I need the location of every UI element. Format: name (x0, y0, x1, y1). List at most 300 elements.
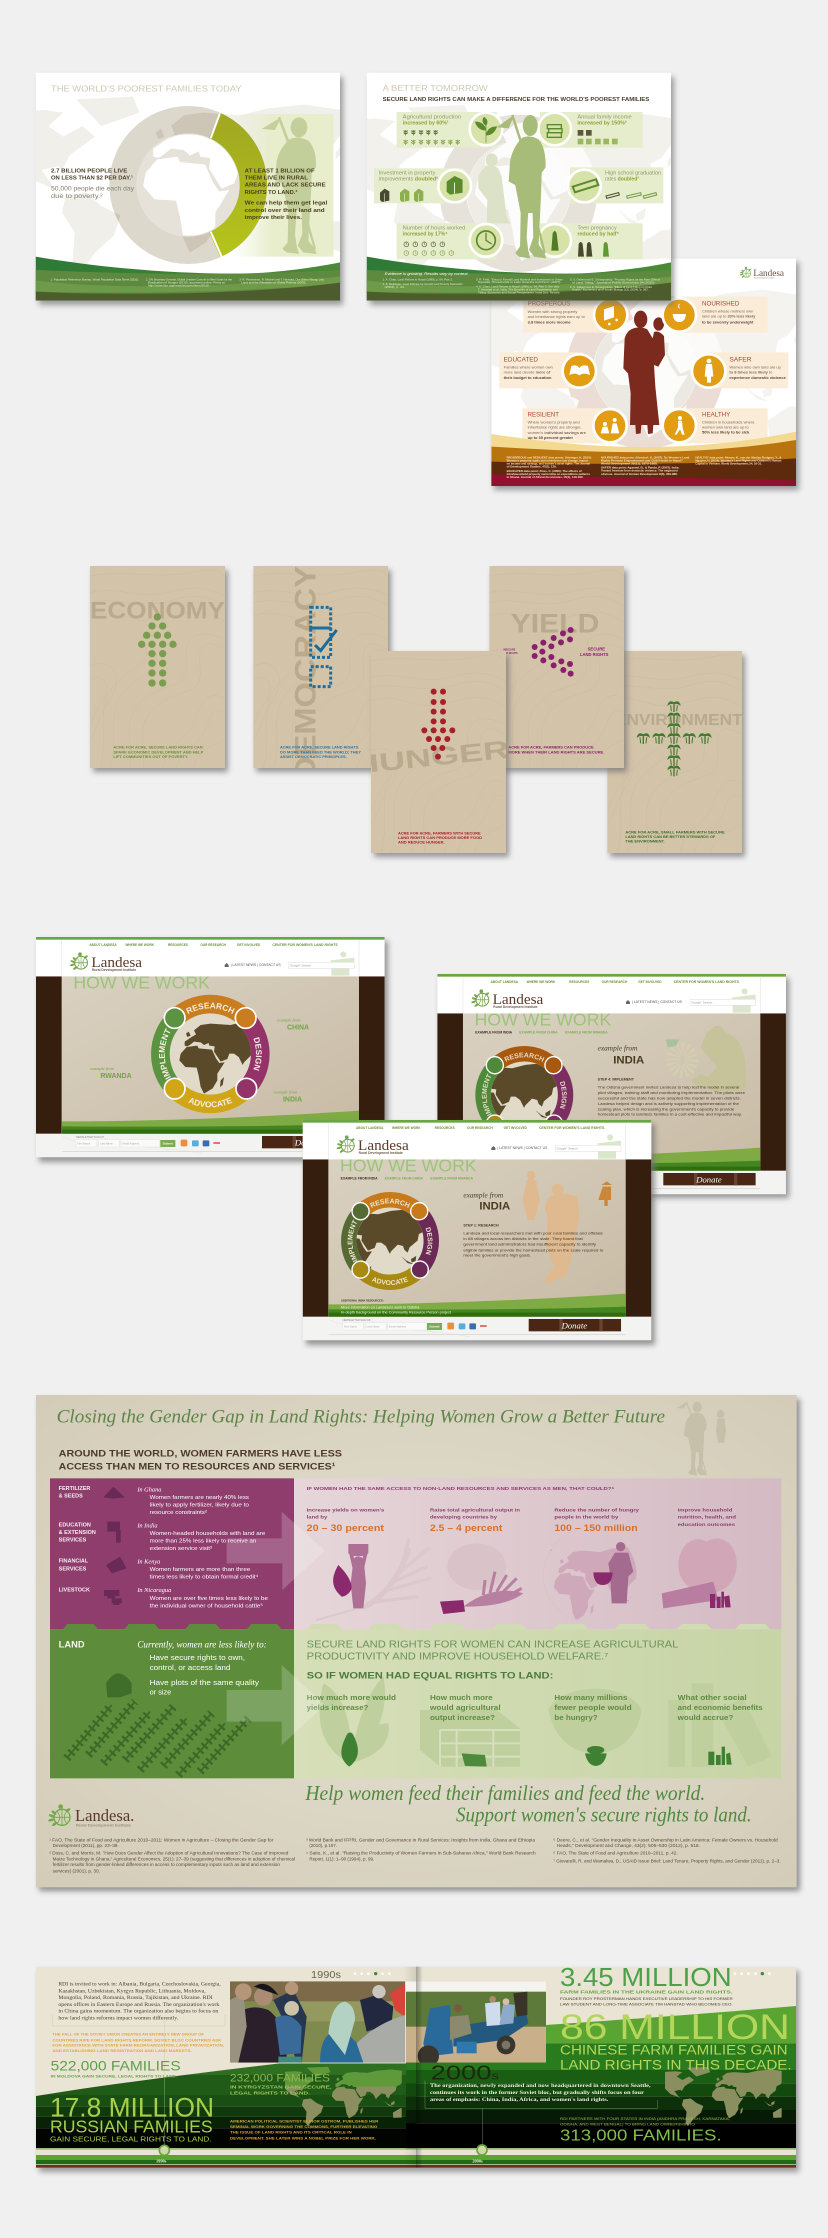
footer: newsletter and donate (329, 1319, 626, 1337)
footer waves with sources: (2003), p. 44. (385, 287, 405, 289)
timeline band: 2000s (472, 2159, 483, 2164)
text block: rdi invited: RDI is invited to work in: Albania, Bulgaria, Czechoslovakia, Georgia, (58, 1981, 221, 1987)
panel: land (green): or size (150, 1688, 171, 1697)
navigation: GET INVOLVED (504, 1126, 528, 1130)
stat: 3.45 million: LAW STUDENT AND LONG-TIME ASSOCIATE TIM HANSTAD WHO BECOMES CEO. (560, 2002, 733, 2006)
chart: how we work wheel: ADVOCATE (188, 1097, 232, 1108)
logo: Landesa: Landesa (91, 955, 143, 971)
footer waves with sources: http://www.fao.org/news/story/en/item/2010. (148, 284, 210, 287)
navigation: ABOUT LANDESA (89, 943, 117, 947)
navigation: CENTER FOR WOMEN'S LAND RIGHTS (674, 980, 739, 984)
panel: resource gaps (purple): LIVESTOCK (59, 1587, 90, 1593)
panel: democracy poster card (253, 566, 391, 780)
chart: donut of poverty share (109, 106, 334, 264)
panel: what could happen (pink): Increase yields on women's (307, 1507, 385, 1512)
callout: investment in property (374, 168, 471, 203)
footer: newsletter and donate (463, 1173, 760, 1191)
heading: ENVIRONMENT (615, 712, 743, 729)
stat: 313,000 families: ODISHA, AND WEST BENGAL) TO BRING LAND OWNERSHIP TO (560, 2123, 695, 2127)
heading: resources gap (59, 1449, 342, 1471)
timeline band: 1990s (156, 2159, 167, 2164)
footer waves with sources: Titling: Economic and Social Perspectives. India Dev. Review (478, 291, 560, 294)
icon: purple beet rows (532, 627, 574, 677)
panel: land (green): Have secure rights to own, (150, 1653, 245, 1662)
stat: 522,000 families (51, 2058, 181, 2078)
caption: LIFT COMMUNITIES OUT OF POVERTY. (113, 755, 189, 759)
footer waves with sources: obvious. Journal of Human Development 8(3), 359-388. (601, 472, 678, 476)
text block: 2.7 billion: 50,000 people die each day (51, 187, 134, 193)
caption: ACRE FOR ACRE, SECURE LAND RIGHTS CAN (113, 746, 204, 750)
illustration: farmer bending with plants (665, 1026, 746, 1091)
callout: healthy: 50% less likely to be sick (702, 429, 750, 434)
text block: 1 billion rural: improve their lives. (245, 215, 302, 221)
label: insecure land rights: INSECURE (503, 649, 516, 651)
navigation: RESOURCES (168, 943, 188, 947)
text block: additional resources (341, 1299, 451, 1314)
callout: nourished: NOURISHED (702, 301, 739, 308)
callout: educated: more land devote more of (504, 370, 551, 375)
footer waves with sources: 2. K. Deininger, Land Policies for Growth and Poverty Reduction (383, 283, 464, 286)
footnotes: (2010), p.107. (309, 1843, 337, 1848)
text block: india step 4: homestead plots to landless families in a cost-effective and impactful way. (598, 1113, 742, 1117)
stat: 3.45 million: 3.45 MILLION (560, 1962, 732, 1992)
text block: india step 1: example from (463, 1190, 503, 1199)
panel: what could happen (pink) (294, 1478, 781, 1633)
heading: HUNGER (352, 736, 510, 780)
panel: resource gaps (purple) (50, 1478, 294, 1629)
text block: soviet union (52, 2031, 224, 2053)
footer waves with sources: 4. K. Chan, Land Reform in Nepal (1999), p. 64, Part 3; See also (476, 286, 560, 289)
panel: what could happen (pink): Reduce the number of hungry (554, 1507, 640, 1512)
stat: 17.8 million: 17.8 MILLION (50, 2093, 214, 2123)
caption: LAND RIGHTS CAN BE BETTER STEWARDS OF (625, 835, 715, 839)
panel: website screen how we work overview (35, 937, 392, 1166)
label: rwanda example (90, 1066, 132, 1080)
logo: Landesa (336, 1135, 409, 1155)
text block: india step 4: STEP 4: IMPLEMENT (598, 1077, 635, 1081)
callout: educated: their budget to education (504, 375, 552, 380)
panel: 1990s page (36, 1967, 424, 2168)
label: insecure land rights (503, 649, 518, 655)
text block: india step 4: INDIA (613, 1054, 644, 1066)
navigation (89, 943, 338, 947)
callout: healthy: women own land are up to (702, 424, 750, 429)
text block: 1 billion rural: control over their land and (245, 208, 325, 214)
panel: resource gaps (purple): In Kenya (136, 1558, 160, 1565)
footer waves with sources: PROSPEROUS and RESILIENT data points: Deininger, K. (2010). (507, 455, 592, 459)
panel: equal rights to land (light green): yields increase? (307, 1703, 369, 1712)
panel: website screen india implement step: Google" Search (691, 1001, 713, 1005)
callout: high school graduation (568, 167, 663, 203)
panel: what could happen (pink): Improve household (678, 1507, 733, 1512)
navigation: OUR RESEARCH (602, 980, 628, 984)
heading: HOW WE WORK (340, 1156, 477, 1176)
text block: organization: areas of emphasis: China, India, Africa, and women's land rights. (430, 2098, 609, 2103)
panel: resource gaps (purple): more than 25% less likely to receive an (150, 1539, 256, 1545)
panel: equal rights to land (light green): How much more would (307, 1693, 396, 1702)
panel: 2000s page (406, 1962, 804, 2168)
navigation (491, 980, 739, 984)
stat: 86 million: 86 MILLION (560, 2008, 790, 2047)
footer waves with sources: 1. A. Chan, Land Reform in Nepal (1999), p. 64, Part 3. (383, 279, 453, 282)
panel: what could happen (pink): developing countries by (430, 1515, 498, 1520)
world map (643, 2067, 804, 2126)
panel: a better tomorrow for women (maroon slide) (490, 258, 802, 494)
footer waves with sources (491, 432, 796, 486)
panel: what could happen (pink): land by (307, 1515, 328, 1520)
photo: truck with passengers (406, 1981, 546, 2067)
text block: india step 4: pilot villages, training staff and monitoring implementation. The pilots were (598, 1091, 745, 1095)
footer: newsletter and social: Donate (294, 1137, 321, 1147)
text block: rdi invited: Mongolia, Poland, Romania, Russia, Tajikistan, and Ukraine. RDI (58, 1995, 213, 2001)
text block: soviet union: FOR ASSISTANCE WITH STATE FARM REORGANIZATION, LAND PRIVATIZATION, (52, 2043, 224, 2048)
text block: rdi invited: Kazakhstan, Uzbekistan, Kyrgyz Republic, Lithuania, Moldova, (58, 1988, 206, 1994)
panel: land (green) (50, 1624, 294, 1778)
navigation: CENTER FOR WOMEN'S LAND RIGHTS (272, 943, 338, 947)
footer: newsletter and social: Submit (163, 1142, 173, 1146)
panel: website screen india research step: Google" Search (557, 1147, 578, 1151)
panel: equal rights to land (light green): How much more (430, 1693, 493, 1702)
panel: what could happen (pink): Raise total agricultural output in (430, 1507, 520, 1512)
stat: 86 million (560, 2008, 792, 2072)
illustration: grain and carrots (440, 1543, 523, 1614)
callout: educated: Families where women own (504, 364, 553, 369)
text block: india step 1: meet the government's high goals. (463, 1254, 531, 1258)
panel: equal rights to land (light green): How many millions (554, 1693, 627, 1702)
panel: what could happen (pink): education outcomes (678, 1522, 736, 1527)
callout: agricultural production: Agricultural production (403, 114, 461, 120)
timeline band (36, 2015, 416, 2168)
label: secure land rights (580, 647, 609, 657)
label: india example (274, 1090, 302, 1104)
callout: safer: Women who own land are up (729, 364, 782, 369)
callout: agricultural production: increased by 60%¹ (403, 121, 449, 127)
callout: resilient: women's individual savings are (528, 430, 587, 435)
text block: rdi invited: how land rights reforms impact women differently. (58, 2015, 178, 2022)
footer waves with sources: Capital in Vietnam. World Development, 54, 18-31. (695, 462, 762, 466)
chart: how we work wheel, research step: DESIGN (426, 1227, 432, 1255)
stat: 17.8 million: GAIN SECURE, LEGAL RIGHTS TO LAND. (50, 2134, 212, 2143)
panel: equal rights to land (light green): What other social (678, 1693, 747, 1702)
tabs: example countries (475, 1031, 608, 1035)
text block: india step 4: example from (598, 1044, 637, 1053)
callout: nourished: Children whose mothers own (702, 308, 753, 313)
logo: Landesa: Rural Development Institute (359, 1151, 403, 1155)
footer waves with sources: 3. R. Field, "Entry to Formal Land Markets and Investment in Urban (476, 278, 564, 281)
stat: 3.45 million: FARM FAMILIES IN THE UKRAINE GAIN LAND RIGHTS. (560, 1990, 733, 1995)
footer: newsletter and donate: First Name (344, 1325, 358, 1329)
footer waves with sources (36, 257, 340, 301)
callout: safer: SAFER (729, 357, 752, 364)
footnotes: fertilizer results from gender-linked differences in access to complementary inputs such as land and extension (53, 1862, 281, 1867)
text block: india step 1: government land administrators had insufficient capacity to identify (463, 1243, 596, 1247)
footer waves with sources: of Development Studies, 47(5), 120. (507, 465, 557, 469)
footer: newsletter and donate: NEWSLETTER SIGN UP (343, 1319, 371, 1322)
heading: resources gap: AROUND THE WORLD, WOMEN FARMERS HAVE LESS (59, 1449, 342, 1459)
navigation: OUR RESEARCH (467, 1126, 493, 1130)
panel: land (green): Have plots of the same quality (150, 1678, 259, 1687)
panel: what could happen (pink): 2.5 – 4 percent (430, 1523, 502, 1533)
illustration: apple, diploma and books (662, 1538, 737, 1608)
text block: rdi invited: in China gains momentum. The organization also begins to focus on (58, 2008, 219, 2015)
callout: annual family income: Annual family income (577, 114, 632, 120)
callout: nourished: to be severely underweight (702, 319, 754, 324)
footnotes: ⁴ Saito, K., et al. "Raising the Productivity of Women Farmers in Sub-Saharan Africa," World Bank Research (306, 1851, 536, 1856)
callout: high school graduation: rates doubled³ (605, 177, 639, 183)
footer waves with sources: HEALTHY data point: Menon, N., van der Meulen Rodgers, Y., & (695, 455, 781, 459)
icon: dotted ballot boxes with check (311, 607, 337, 687)
caption: THE ENVIRONMENT. (625, 840, 665, 844)
text block: 2.7 billion: due to poverty.² (51, 194, 103, 200)
footer waves with sources: 5. S. Galiani and E. Schargrodsky, "Property Rights for the Poor: Effects (570, 279, 661, 282)
chart: how we work wheel: DESIGN (254, 1037, 262, 1071)
text block: 1 billion rural: We can help them get legal (245, 201, 328, 207)
panel: website screen india implement step (436, 974, 793, 1202)
icon: faded farmer and woman silhouettes (677, 1402, 726, 1475)
chart: how we work wheel, implement step: RESEARCH (504, 1052, 544, 1062)
panel: hunger poster card (352, 651, 510, 857)
panel: a better tomorrow slide (366, 73, 678, 309)
navigation: RESOURCES (569, 980, 589, 984)
footer: newsletter and donate: Last Name (367, 1325, 380, 1329)
logo: Landesa: Landesa. (75, 1806, 134, 1825)
text block: organization: continues its work in the former Soviet bloc, but gradually shifts focus on four (430, 2091, 645, 2096)
heading: ECONOMY (90, 597, 225, 624)
panel: what could happen (pink): 100 – 150 million (554, 1523, 638, 1533)
navigation dots (354, 1972, 391, 1975)
panel: resource gaps (purple): SERVICES (59, 1538, 87, 1544)
footnotes (49, 1837, 781, 1874)
logo: Landesa: Landesa (358, 1138, 409, 1154)
panel: what could happen (pink): people in the world by (554, 1515, 619, 1520)
tabs: example countries: EXAMPLE FROM CHINA (519, 1031, 558, 1035)
text block: india step 1: STEP 1: RESEARCH (463, 1224, 499, 1228)
footer: newsletter and donate: Donate (561, 1320, 587, 1330)
arrow: resources to outcomes (227, 1512, 325, 1590)
footer waves with sources: SAFER data point: Agarwal, B., & Panda, P. (2007). India. (601, 466, 680, 470)
navigation: ABOUT LANDESA (356, 1126, 384, 1130)
footnotes: services) (2001), p. 30. (53, 1869, 100, 1874)
footnotes: Maize Technology in Ghana," Agricultural Economics, 25(1): 27–39 (suggesting that differences in adoption of chemical (53, 1856, 295, 1861)
callout: nourished: land are up to 33% less likely (702, 314, 756, 319)
text block: rdi invited (58, 1981, 221, 2022)
panel: what could happen (pink): nutrition, health, and (678, 1515, 736, 1520)
text block: ostrom: THE ISSUE OF LAND RIGHTS AND ITS CRITICAL ROLE IN (230, 2131, 352, 2135)
callout: prosperous: 3.8 times more income (528, 319, 571, 324)
heading: HOW WE WORK (475, 1010, 611, 1030)
text block: 1 billion rural: THEM LIVE IN RURAL (245, 175, 309, 181)
footer waves with sources: Nguyen, H. (2014). Women's Land Rights and Children's Human (695, 458, 782, 462)
icon: woman with basket silhouette (478, 153, 510, 223)
callout: investment in property: improvements doubled² (379, 177, 438, 183)
chart: how we work wheel: IMPLEMENT (158, 1028, 171, 1080)
chart: how we work wheel, implement step: ADVOCATE (505, 1130, 544, 1141)
panel: website screen india research step: | LATEST NEWS | CONTACT US (497, 1146, 548, 1150)
callout: nourished (663, 297, 768, 333)
callout: prosperous (523, 297, 627, 333)
footer waves with sources: Evidence is growing. Results vary by context. (385, 271, 469, 276)
stat: 232,000 families: LEGAL RIGHTS TO LAND. (230, 2090, 310, 2095)
stat: 313,000 families: RDI PARTNERS WITH FOUR STATES IN INDIA (ANDHRA PRADESH, KARNATAKA, (560, 2117, 730, 2121)
callout: agricultural production (397, 112, 502, 148)
callout: healthy: Children in households where (702, 419, 755, 424)
callout: prosperous: PROSPEROUS (528, 301, 571, 308)
tabs: example countries: EXAMPLE FROM INDIA (475, 1031, 513, 1035)
illustration: food bowl (548, 1689, 642, 1766)
navigation: GET INVOLVED (638, 980, 662, 984)
panel: resource gaps (purple): Women are over five times less likely to be (150, 1596, 268, 1602)
callout: safer: to 8 times less likely to (729, 370, 773, 375)
callout: annual family income (538, 112, 643, 148)
label: rwanda example: RWANDA (100, 1073, 132, 1080)
heading: DEMOCRACY (289, 566, 322, 780)
stat: 232,000 families: 232,000 FAMILIES (230, 2073, 330, 2085)
stat: 522,000 families: IN MOLDOVA GAIN SECURE, LEGAL RIGHTS TO LAND. (51, 2073, 177, 2078)
footnotes: ¹ FAO, The State of Food and Agriculture 2010–2011: Women in Agriculture – Closing the Gender Gap for (49, 1837, 274, 1842)
text block: ostrom: AMERICAN POLITICAL SCIENTIST ELINOR OSTROM, PUBLISHES HER (230, 2120, 379, 2124)
panel: closing the gender gap poster (36, 1395, 800, 1891)
tabs: example countries: EXAMPLE FROM RWANDA (565, 1031, 608, 1035)
stat: 232,000 families: IN KYRGYZSTAN GAIN SECURE, (230, 2084, 332, 2089)
caption: SPARK ECONOMIC DEVELOPMENT AND HELP (113, 750, 203, 754)
navigation (356, 1126, 604, 1130)
logo: Landesa (48, 1804, 134, 1828)
callout: prosperous: and inheritance rights earn up to (528, 314, 586, 319)
title: Closing the Gender Gap in Land Rights: Helping Women Grow a Better Future (57, 1407, 665, 1428)
panel: equal rights to land (light green): SECURE LAND RIGHTS FOR WOMEN CAN INCREASE AGRICULTURAL (307, 1639, 679, 1650)
panel: resource gaps (purple): FINANCIAL (59, 1559, 89, 1565)
icon: farmer silhouette (497, 115, 546, 258)
footer waves with sources: NOURISHED data point: Allendorf, K. (2007). Do Women's Land (601, 455, 690, 459)
text block: 1 billion rural: RIGHTS TO LAND.³ (245, 189, 297, 196)
chart: how we work wheel, research step: ADVOCATE (372, 1276, 408, 1285)
footer waves with sources: World Development 35(11), 1975-1988. (601, 462, 658, 466)
label: rwanda example: example from (90, 1066, 114, 1071)
footer waves with sources: Squatter Households in Latin America and Peru" (2007). (478, 281, 562, 284)
caption (625, 831, 725, 844)
callout: healthy: HEALTHY (702, 412, 731, 419)
icon: hut (106, 1673, 132, 1697)
callout: resilient (522, 408, 627, 443)
text block: organization (430, 2084, 652, 2103)
text block: india step 1: eligible families or provide the homestead plots on the scale required to (463, 1248, 603, 1252)
stat: 86 million: CHINESE FARM FAMILIES GAIN (560, 2041, 788, 2057)
text block: 1 billion rural (245, 168, 328, 221)
panel: equal rights to land (light green): output increase? (430, 1713, 495, 1722)
tabs: example countries: EXAMPLE FROM CHINA (385, 1177, 424, 1181)
panel: equal rights to land (light green): be hungry? (554, 1713, 598, 1722)
navigation: WHERE WE WORK (125, 943, 155, 947)
illustration: crate and money stack (420, 1710, 520, 1767)
chart: how we work wheel, implement step (475, 1046, 574, 1120)
panel: economy poster card (90, 566, 228, 772)
callout: resilient: RESILIENT (528, 412, 559, 419)
logo: Landesa (70, 952, 143, 972)
text block: rdi invited: opens offices in Eastern Europe and Russia. The organization's work (58, 2001, 220, 2008)
text block: additional resources: In-depth background on the Community Resource Person project (341, 1310, 451, 1314)
world map (263, 2067, 424, 2126)
navigation: WHERE WE WORK (392, 1126, 421, 1130)
footer: newsletter and donate: Email Address (389, 1325, 407, 1329)
callout: hours worked (397, 223, 502, 259)
label: secure land rights: SECURE (588, 647, 605, 652)
panel: resource gaps (purple): Women farmers are nearly 40% less (150, 1495, 249, 1501)
callout: investment in property: Investment in property (379, 170, 436, 176)
panel: equal rights to land (light green): fewer people would (554, 1703, 632, 1712)
callout: educated: EDUCATED (504, 357, 538, 364)
text block: soviet union: THE FALL OF THE SOVIET UNION CREATES AN ENTIRELY NEW GROUP OF (52, 2031, 205, 2036)
callout: high school graduation: High school graduation (605, 170, 661, 176)
heading: 1990s: 1990s (311, 1970, 341, 1981)
chart: how we work wheel, research step (341, 1192, 439, 1290)
footer: newsletter and social: First Name (77, 1142, 91, 1146)
footnotes: Heads," Development and Change, 43(2): 505–530 (2012), p. 518. (557, 1843, 700, 1848)
icon: plant field rows (67, 1702, 248, 1775)
illustration: globe with man and bowl (465, 1528, 672, 1633)
footer waves with sources: on income and savings, and women's asset rights. The Journal (507, 462, 590, 466)
footnotes: Development (2011), pp. 23–39. (53, 1843, 119, 1848)
callout: hours worked: Number of hours worked (403, 225, 465, 231)
text block: 2.7 billion: ON LESS THAN $2 PER DAY.¹ (51, 174, 133, 181)
chart: how we work wheel, implement step: IMPLEMENT (482, 1074, 492, 1116)
logo: Landesa (471, 989, 544, 1009)
panel: land (green): control, or access land (150, 1663, 230, 1672)
label: insecure land rights: LD RIGHTS (505, 653, 518, 655)
caption: DO MORE THAN FEED THE WORLD; THEY (280, 750, 362, 754)
heading: resources gap: ACCESS THAN MEN TO RESOURCES AND SERVICES¹ (59, 1461, 335, 1471)
panel: website screen how we work overview: Google" Search (290, 964, 311, 968)
label: china example: CHINA (287, 1024, 309, 1031)
text block: india step 4: Landesa helped design and is actively supporting implementation of the (598, 1102, 739, 1106)
logo: Landesa: Rural Development Institute (76, 1824, 131, 1828)
icon: cross of green plants (637, 701, 712, 776)
text block: india step 4 (598, 1044, 745, 1117)
icon: down arrow of red dots (421, 689, 455, 760)
caption: ACRE FOR ACRE, SECURE LAND RIGHTS (280, 746, 358, 750)
footer waves with sources: 6. S. Galiani and E. Schargrodsky, "Effect of Land Titling on Child (570, 286, 653, 289)
footer waves with sources: intrahousehold property ownership on expenditure patterns (507, 472, 591, 476)
text block: additional resources: ADDITIONAL INDIA RESOURCES: (341, 1299, 384, 1303)
panel: what could happen (pink): IF WOMEN HAD THE SAME ACCESS TO NON-LAND RESOURCES AND SERVICES AS MEN, THAT COULD?⁶ (307, 1486, 614, 1492)
panel: resource gaps (purple): In Nicaragua (136, 1587, 171, 1594)
text block: ostrom (230, 2120, 379, 2140)
chart: how we work wheel, research step: IMPLEMENT (348, 1220, 358, 1262)
navigation: GET INVOLVED (237, 943, 261, 947)
stat: 313,000 families: 313,000 FAMILIES. (560, 2128, 722, 2145)
call to action: Help women feed their families and feed the world. (304, 1783, 705, 1805)
logo: Landesa: Landesa (753, 268, 784, 278)
panel: resource gaps (purple): resource constraints² (150, 1510, 207, 1516)
panel: environment poster card (607, 651, 745, 857)
navigation: ABOUT LANDESA (491, 980, 519, 984)
label: secure land rights: LAND RIGHTS (580, 652, 609, 657)
callout: teen pregnancy (538, 223, 643, 259)
footer: newsletter and donate: Donate (695, 1174, 722, 1184)
text block: india step 1: Landesa and local researchers met with poor rural families and officials (463, 1232, 603, 1236)
panel: equal rights to land (light green): SO IF WOMEN HAD EQUAL RIGHTS TO LAND: (307, 1670, 553, 1680)
logo: Landesa (740, 267, 784, 280)
caption (508, 746, 604, 754)
panel: resource gaps (purple): In Ghana (136, 1486, 161, 1493)
footer waves with sources: Rights Promote Empowerment and Child Health in Nepal? (601, 458, 683, 462)
panel: resource gaps (purple): likely to apply fertilizer, likely due to (150, 1502, 249, 1508)
footnotes: ³ World Bank and IFPRI, Gender and Governance in Rural Services: Insights from India, Ghana and Ethiopia (306, 1837, 536, 1842)
text block: 2.7 billion: 2.7 BILLION PEOPLE LIVE (51, 169, 128, 175)
icon: woman carrying child silhouette (623, 311, 665, 434)
world map background (36, 96, 340, 264)
footnotes: Report, 1(1): 1–90 (1994), p. 99. (309, 1856, 374, 1861)
text block: 1 billion rural: AT LEAST 1 BILLION OF (245, 168, 315, 174)
